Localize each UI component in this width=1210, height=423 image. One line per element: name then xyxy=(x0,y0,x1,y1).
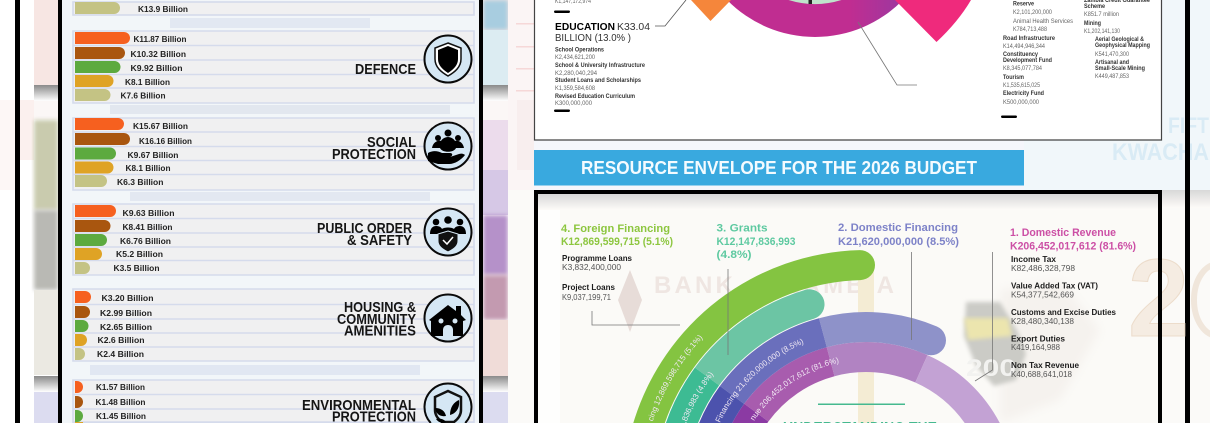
chart group: housing and community amenities: K3.20 Billion xyxy=(102,293,154,303)
text block: education: K2,280,040,294 xyxy=(555,71,598,77)
icon: house with family xyxy=(424,294,472,342)
watermark: fifty kwacha xyxy=(1112,113,1209,166)
text block: education: School Operations xyxy=(555,48,605,54)
text block: education xyxy=(554,0,650,112)
text block: grants: K12,147,836,993 xyxy=(716,236,796,248)
heading: housing and community amenities: COMMUNITY xyxy=(337,311,416,328)
text block: domestic financing: K21,620,000,000 (8.5%) xyxy=(838,236,959,248)
text block: education: Revised Education Curriculum xyxy=(555,94,635,100)
chart group: social protection: K8.1 Billion xyxy=(126,163,170,173)
heading: social protection: SOCIAL xyxy=(367,134,416,151)
text block: infrastructure column: Animal Health Services xyxy=(1013,19,1073,25)
text block: infrastructure column: K784,713,488 xyxy=(1013,27,1048,33)
ring: foreign financing xyxy=(633,250,875,423)
leader line: magenta segment xyxy=(858,22,917,85)
text block: domestic revenue xyxy=(1010,227,1136,379)
chart group: social protection xyxy=(73,118,474,190)
chart group: defence: K9.92 Billion xyxy=(130,63,182,73)
text block: education: K300,000,000 xyxy=(555,101,593,107)
heading: public order and safety: & SAFETY xyxy=(347,232,412,249)
chart group: public order and safety: K5.2 Billion xyxy=(116,249,163,259)
chart group: environmental protection: K1.57 Billion xyxy=(96,382,145,392)
heading: defence: DEFENCE xyxy=(355,61,416,78)
text block: mining column: Artisanal and xyxy=(1095,60,1129,66)
text block: infrastructure column: Reserve xyxy=(1013,2,1035,8)
text block: mining column: Aerial Geological & xyxy=(1095,37,1145,43)
chart group: social protection: K9.67 Billion xyxy=(128,150,178,160)
text block: domestic revenue: Income Tax xyxy=(1011,254,1056,264)
text block: foreign financing: K12,869,599,715 (5.1%) xyxy=(561,236,673,248)
chart group: defence xyxy=(73,31,474,103)
text block: infrastructure column: K14,494,946,344 xyxy=(1003,44,1046,50)
text block: grants: 3. Grants xyxy=(716,222,768,234)
text block: foreign financing: 4. Foreign Financing xyxy=(561,223,670,235)
text block: infrastructure column: K2,101,200,000 xyxy=(1013,10,1053,16)
chart group: public order and safety: K3.5 Billion xyxy=(114,263,160,273)
text block: mining column: K449,487,853 xyxy=(1095,74,1130,80)
banner: resource envelope heading xyxy=(534,150,1024,186)
chart group: housing and community amenities: K2.65 Billion xyxy=(100,322,152,332)
text block: infrastructure column xyxy=(1001,2,1073,118)
text block: domestic financing: 2. Domestic Financing xyxy=(838,222,958,234)
watermark: bank of zambia and map xyxy=(618,237,1210,423)
text block: domestic revenue: K82,486,328,798 xyxy=(1011,263,1075,273)
leader line: education xyxy=(655,0,686,26)
chart group: housing and community amenities: K2.99 Billion xyxy=(100,308,152,318)
text block: education: BILLION (13.0% ) xyxy=(555,32,631,44)
text block: mining column: Small-Scale Mining xyxy=(1095,66,1145,72)
text block: education: K1,359,584,608 xyxy=(555,86,596,92)
text block: education: School & University Infrastructure xyxy=(555,63,646,69)
text block: mining column: K541,470,300 xyxy=(1095,52,1130,58)
chart group: defence: K10.32 Billion xyxy=(130,49,186,59)
panel: spending comparison xyxy=(60,0,481,423)
text block: domestic revenue: K28,480,340,138 xyxy=(1011,316,1074,326)
heading: social protection xyxy=(332,134,416,163)
watermark: bank of zambia and map: BANK of ZAMBIA xyxy=(654,272,894,299)
text block: domestic revenue: K419,164,988 xyxy=(1011,342,1060,352)
ring: foreign financing: Foreign Financing 12,869,598,715 (5.1%) xyxy=(648,335,703,421)
text block: mining column: K1,202,141,130 xyxy=(1084,29,1121,35)
text block: education: K33.04 xyxy=(617,21,650,33)
ring: domestic financing xyxy=(699,312,946,423)
text block: mining column: K851.7 million xyxy=(1084,12,1119,18)
chart group: defence: K8.1 Billion xyxy=(125,77,170,87)
heading: housing and community amenities xyxy=(337,299,416,340)
icon: leaf in shield xyxy=(424,383,471,423)
text block: infrastructure column: Constituency xyxy=(1003,52,1039,58)
text block: foreign financing: K9,037,199,71 xyxy=(562,292,611,302)
text block: domestic revenue: Customs and Excise Duties xyxy=(1011,307,1116,317)
wedge: orange xyxy=(691,0,731,21)
row: top value xyxy=(73,2,474,15)
panel: budget allocation donut card xyxy=(534,0,1162,140)
text block: infrastructure column: Tourism xyxy=(1003,75,1024,81)
text block: infrastructure column: K1,535,615,025 xyxy=(1003,83,1041,89)
chart group: environmental protection xyxy=(73,380,474,423)
text block: domestic revenue: 1. Domestic Revenue xyxy=(1010,227,1116,239)
chart group: social protection: K16.16 Billion xyxy=(139,136,192,146)
chart group: public order and safety: K9.63 Billion xyxy=(122,208,174,218)
text block: foreign financing: Project Loans xyxy=(562,282,615,292)
text block: education: Student Loans and Scholarships xyxy=(555,78,642,84)
chart group: social protection: K6.3 Billion xyxy=(117,177,164,187)
icon: shield xyxy=(424,36,472,82)
chart group: environmental protection: K1.45 Billion xyxy=(96,411,146,421)
text block: mining column: Mining xyxy=(1084,21,1101,27)
text block: domestic revenue: Non Tax Revenue xyxy=(1011,360,1079,370)
text block: infrastructure column: Road Infrastructure xyxy=(1003,36,1056,42)
text block: mining column xyxy=(1084,0,1151,80)
text block: education: EDUCATION xyxy=(555,21,615,33)
text block: domestic revenue: Export Duties xyxy=(1011,334,1065,344)
text block: education: K2,434,621,200 xyxy=(555,55,596,61)
chart group: housing and community amenities: K2.6 Billion xyxy=(98,335,144,345)
ring: grants xyxy=(666,289,824,423)
text block: foreign financing: Programme Loans xyxy=(562,253,632,263)
watermark: bank of zambia and map: 2 xyxy=(1128,237,1189,360)
ring: grants: Grants 12,147,836,983 (4.8%) xyxy=(682,372,714,423)
text block: grants xyxy=(716,222,796,261)
chart group: defence: K11.87 Billion xyxy=(134,34,186,44)
text block: domestic financing xyxy=(838,222,959,248)
text block: infrastructure column: K8,345,077,784 xyxy=(1003,66,1043,72)
chart group: housing and community amenities: K2.4 Billion xyxy=(97,349,144,359)
text block: foreign financing: K3,832,400,000 xyxy=(562,262,621,272)
chart group: housing and community amenities xyxy=(73,289,474,361)
leader lines xyxy=(592,252,992,381)
text block: domestic revenue: K54,377,542,669 xyxy=(1011,290,1074,300)
chart group: social protection: K15.67 Billion xyxy=(133,121,188,131)
text block: infrastructure column: K500,000,000 xyxy=(1003,100,1040,106)
ring: domestic revenue: Domestic Revenue 206,452,017,612 (81.6%) xyxy=(750,357,838,421)
heading: environmental protection: ENVIRONMENTAL xyxy=(302,397,416,414)
row: top value: K13.9 Billion xyxy=(138,4,188,14)
banner: resource envelope heading: RESOURCE ENVELOPE FOR THE 2026 BUDGET xyxy=(581,158,977,178)
chart group: defence: K7.6 Billion xyxy=(120,90,166,100)
text block: domestic revenue: Value Added Tax (VAT) xyxy=(1011,280,1098,290)
text block: infrastructure column: Electricity Fund xyxy=(1003,91,1044,97)
text block: domestic revenue: K40,688,641,018 xyxy=(1011,369,1072,379)
ring: domestic financing: Domestic Financing 21,620,000,000 (8.5%) xyxy=(715,338,804,422)
text block: foreign financing xyxy=(561,223,673,302)
chart group: environmental protection: K1.48 Billion xyxy=(96,397,146,407)
chart group: public order and safety: K6.76 Billion xyxy=(120,236,171,246)
text block: mining column: Geophysical Mapping xyxy=(1095,43,1150,49)
text block: infrastructure column: Development Fund xyxy=(1003,58,1052,64)
heading: social protection: PROTECTION xyxy=(332,146,416,163)
icon: people with shield xyxy=(424,208,472,256)
heading: housing and community amenities: AMENITIES xyxy=(344,322,416,340)
watermark: bank of zambia and map: 200 xyxy=(966,355,1016,382)
chart group: public order and safety: K8.41 Billion xyxy=(122,222,172,232)
text block: mining column: Scheme xyxy=(1084,4,1106,10)
heading: public order and safety: PUBLIC ORDER xyxy=(317,220,412,237)
chart group: public order and safety xyxy=(73,204,474,275)
icon: people in hand xyxy=(424,122,472,170)
donut chart fragment xyxy=(691,0,971,42)
wedge: pink xyxy=(895,0,971,42)
heading: environmental protection xyxy=(302,397,416,423)
heading: public order and safety xyxy=(317,220,412,249)
text block: domestic revenue: K206,452,017,612 (81.6%) xyxy=(1010,240,1136,252)
text block: grants: (4.8%) xyxy=(716,249,752,261)
heading: housing and community amenities: HOUSING & xyxy=(344,299,416,316)
